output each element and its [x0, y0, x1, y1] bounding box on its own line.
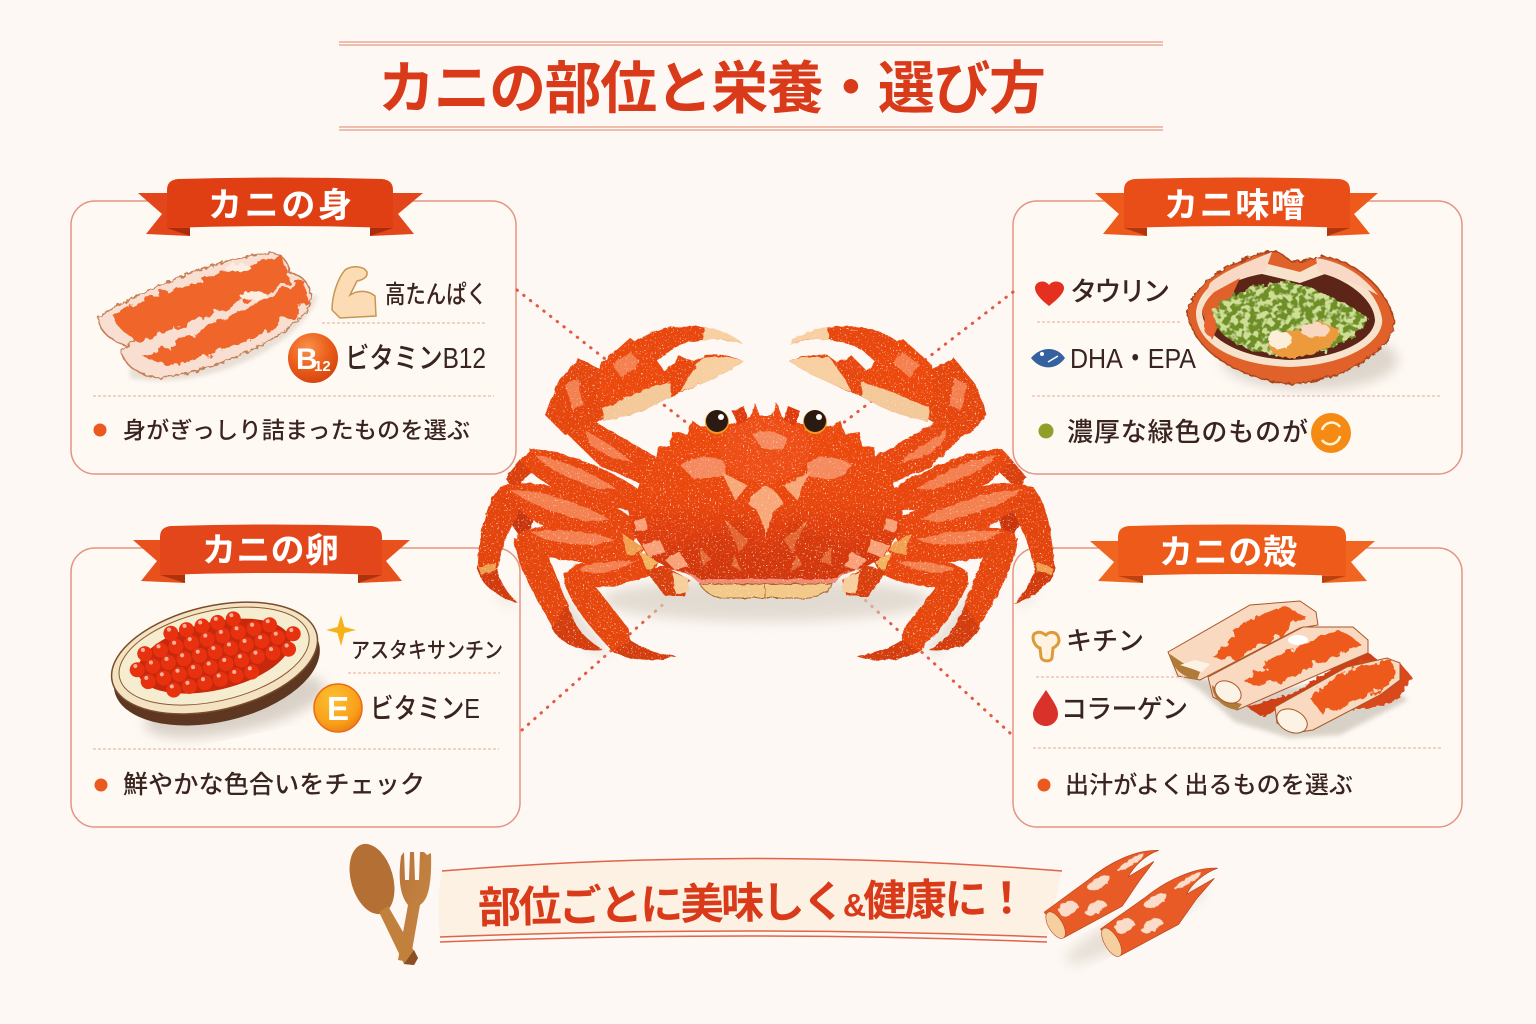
- rear back segment: [505, 452, 535, 490]
- text: astaxanthin: アスタキサンチン: [351, 638, 503, 663]
- food: crab meat fillets: [98, 253, 318, 381]
- banner: crab roe: カニの卵: [202, 532, 339, 570]
- panel: crab meat: [71, 178, 516, 474]
- crab illustration: [477, 326, 1055, 660]
- icon: collagen drop: [1033, 690, 1058, 726]
- leg 2 tibia: [477, 488, 524, 570]
- right eye: [803, 410, 827, 434]
- text: DHA EPA: DHA・EPA: [1070, 343, 1196, 374]
- mouth plate: [700, 584, 767, 598]
- tip: crab miso: 濃厚な緑色のものが: [1067, 417, 1308, 447]
- tip: crab shell: 出汁がよく出るものを選ぶ: [1065, 772, 1353, 799]
- tip: crab roe: 鮮やかな色合いをチェック: [123, 771, 425, 799]
- icon: flexed arm: [332, 267, 376, 318]
- banner: crab shell: [1090, 524, 1375, 583]
- claw arm: [558, 416, 658, 484]
- eye stalk: [732, 406, 748, 426]
- leg 2 femur: [498, 483, 642, 546]
- icon: vitamin E: E: [327, 690, 349, 727]
- leg 3 femur: [516, 525, 645, 563]
- banner: crab miso: カニ味噌: [1164, 187, 1305, 225]
- icon: fish: [1031, 349, 1065, 367]
- food: crab roe on plate: [101, 584, 331, 751]
- leg 4 femur: [564, 554, 660, 588]
- claw lower finger: [664, 355, 743, 398]
- leg 1: [520, 449, 642, 512]
- shell piece 1: [1168, 601, 1318, 680]
- text: taurine: タウリン: [1070, 277, 1170, 307]
- banner: crab meat: カニの身: [208, 187, 352, 225]
- title: [339, 42, 1163, 130]
- tip: crab meat: 身がぎっしり詰まったものを選ぶ: [123, 417, 470, 443]
- leg base: [645, 566, 690, 596]
- icon: vitamin B12: B: [296, 343, 318, 376]
- leg 4 tibia: [564, 579, 631, 652]
- food: crab shell pieces: [1168, 601, 1412, 738]
- icon: wooden fork: [398, 852, 431, 962]
- icon: vitamin B12: 12: [314, 358, 331, 375]
- carapace half: [628, 403, 767, 580]
- shell piece back: [1247, 650, 1378, 717]
- connector lines: [517, 290, 1013, 733]
- icon: heart: [1035, 281, 1064, 306]
- left eye: [705, 410, 729, 434]
- food: crab miso in shell: [1187, 251, 1398, 390]
- banner: crab miso: [1095, 178, 1378, 236]
- panel: crab shell: [1013, 524, 1462, 827]
- claw upper finger: [630, 326, 743, 366]
- icon: chitin bone: [1033, 632, 1059, 661]
- claw wrist: [545, 358, 606, 435]
- text: chitin: キチン: [1066, 626, 1144, 656]
- bottom banner: [438, 858, 1062, 942]
- leg 3 tibia: [514, 538, 568, 630]
- slogan: 部位ごとに美味しく&健康に！: [478, 875, 1028, 933]
- icon: crab claws: [1037, 839, 1232, 974]
- panel: crab roe: [71, 524, 520, 827]
- claw palm: [598, 338, 670, 422]
- text: vitamin B12: ビタミンB12: [345, 342, 486, 375]
- banner: crab meat: [138, 178, 423, 236]
- text: vitamin E: ビタミンE: [370, 693, 480, 724]
- banner: crab roe: [133, 524, 410, 583]
- icon: wooden spoon: [342, 839, 418, 965]
- panel: crab miso: [1013, 178, 1462, 474]
- shell piece 2: [1208, 627, 1368, 710]
- shell piece 3: [1273, 658, 1400, 738]
- icon: vitamin E: [314, 684, 362, 732]
- tip: crab miso: [1038, 413, 1351, 453]
- crab shadow: [495, 578, 1037, 655]
- icon: sparkle star: [326, 615, 356, 646]
- text: collagen: コラーゲン: [1061, 694, 1188, 724]
- text: high protein: 高たんぱく: [385, 281, 487, 309]
- banner: crab shell: カニの殻: [1159, 534, 1297, 572]
- icon: vitamin B12: [288, 333, 338, 383]
- title: カニの部位と栄養・選び方: [378, 57, 1046, 121]
